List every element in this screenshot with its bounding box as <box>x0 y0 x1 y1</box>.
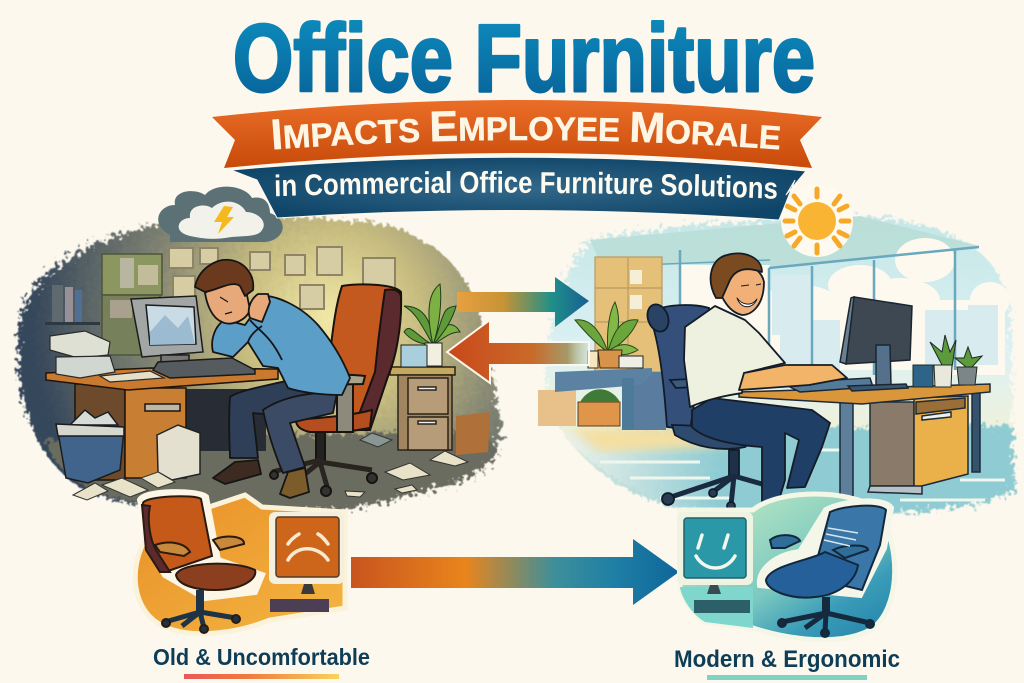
old furniture icon group <box>135 492 345 634</box>
face details <box>220 297 232 314</box>
jeans <box>229 380 320 458</box>
eyes and smile <box>737 284 761 307</box>
bright scene background <box>545 216 1015 518</box>
background low desk with drawers and plants <box>538 368 666 430</box>
cardboard box <box>456 412 490 455</box>
stacks of paper <box>50 331 164 382</box>
head <box>715 264 764 315</box>
teal blob <box>680 494 895 640</box>
bookshelf <box>45 285 100 325</box>
head <box>205 281 250 324</box>
orange banner <box>212 100 822 168</box>
arrow: old to new, right-pointing <box>457 277 589 327</box>
modern monitor and keyboard <box>782 297 912 392</box>
smiling man <box>684 254 847 502</box>
old monitor <box>131 296 203 363</box>
old orange office chair <box>270 284 401 496</box>
sun rays <box>785 189 849 253</box>
paper bag <box>157 425 200 480</box>
sun <box>781 185 853 257</box>
blue ribbon <box>233 158 806 220</box>
comparison arrow <box>351 539 679 605</box>
scattered papers on floor <box>73 433 468 500</box>
modern desk <box>739 384 990 496</box>
desk plants and books <box>913 335 982 387</box>
desk <box>46 368 278 480</box>
white shirt <box>684 306 785 407</box>
arrow: new to old, left-pointing <box>447 320 589 383</box>
upper arm line <box>248 320 282 360</box>
hair <box>195 260 253 296</box>
floor <box>565 425 1015 516</box>
ergonomic chair <box>760 501 891 637</box>
happy monitor <box>677 512 753 613</box>
storm cloud with lightning <box>158 187 283 242</box>
hand on neck <box>249 294 270 322</box>
ribbon text: in Commercial Office Furniture Solutions <box>276 170 777 199</box>
scene: happy employee at modern desk <box>538 216 1015 518</box>
wall frames <box>169 247 395 309</box>
dark scene background <box>18 217 502 515</box>
desk plant and items <box>575 302 643 368</box>
blue task chair <box>644 301 762 510</box>
label: modern and ergonomic: Modern & Ergonomic <box>674 646 900 673</box>
hair <box>711 254 762 298</box>
blue sweater <box>212 296 350 395</box>
title: Office Furniture <box>233 5 815 112</box>
notice boards <box>102 254 162 355</box>
light cloud <box>179 202 264 239</box>
navy trousers <box>692 398 830 502</box>
trash bin with crumpled paper <box>56 410 124 483</box>
cabinet with drawers <box>390 367 455 450</box>
keyboard <box>153 358 255 378</box>
plant and folder <box>401 284 460 367</box>
label: old and uncomfortable: Old & Uncomfortable <box>153 644 370 670</box>
dark cloud <box>158 187 283 242</box>
sad monitor <box>269 512 344 612</box>
ceiling band <box>590 216 980 266</box>
stressed man <box>195 260 350 498</box>
window clouds and skyline <box>680 238 1010 375</box>
forearm and hands <box>739 365 847 390</box>
orange blob <box>135 495 345 634</box>
scene: stressed employee at old desk <box>18 217 502 515</box>
banner text: IMPACTS EMPLOYEE MORALE <box>272 110 780 150</box>
modern furniture icon group <box>677 494 895 640</box>
lightning bolt <box>214 206 234 234</box>
sun disc <box>798 202 836 240</box>
underline: old <box>184 674 339 679</box>
shoes <box>213 460 261 484</box>
old chair <box>140 492 262 633</box>
underline: modern <box>707 675 867 680</box>
window frames <box>640 247 979 375</box>
floor <box>45 430 498 514</box>
back cabinet <box>595 257 662 372</box>
